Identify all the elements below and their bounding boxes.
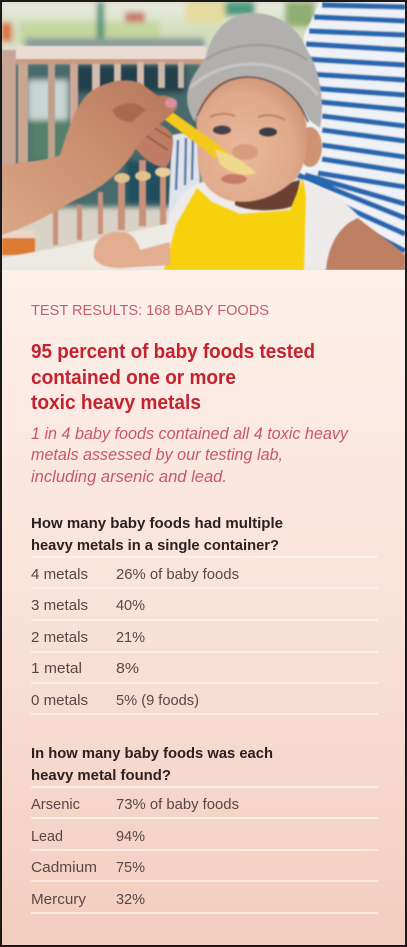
inner palm shadow [112, 103, 146, 122]
striped shirt [296, 2, 405, 254]
row: mercury [31, 891, 145, 908]
railing [2, 46, 206, 245]
thumbnail [165, 98, 177, 108]
row: arsenic: 73% of baby foods [116, 796, 239, 813]
row: arsenic [31, 796, 239, 813]
knit hat [187, 13, 322, 128]
main heading [31, 341, 315, 414]
baby hand [94, 232, 170, 268]
table heading [31, 745, 273, 784]
row: cadmium: Cadmium [31, 859, 97, 876]
row: 2 metals [31, 629, 145, 646]
row: lead [31, 828, 145, 845]
baby nose and lips [221, 144, 258, 184]
baby onesie [168, 180, 360, 270]
row: 0 metals: 5% (9 foods) [116, 692, 199, 709]
yellow bib [164, 178, 306, 270]
table heading: heavy metal found? [31, 767, 171, 784]
row: 1 metal: 8% [116, 660, 139, 677]
table: multiple heavy metals per container [31, 515, 378, 714]
row: arsenic: Arsenic [31, 796, 80, 813]
row: 3 metals: 40% [116, 597, 145, 614]
curled fingers [134, 122, 173, 168]
row: lead: 94% [116, 828, 145, 845]
italic summary text: metals assessed by our testing lab, [31, 445, 283, 464]
table heading: How many baby foods had multiple [31, 515, 283, 532]
row: 4 metals [31, 566, 239, 583]
italic summary text: including arsenic and lead. [31, 467, 227, 486]
italic summary text: 1 in 4 baby foods contained all 4 toxic heavy [31, 424, 349, 443]
row: 1 metal: 1 metal [31, 660, 82, 677]
row: 2 metals: 2 metals [31, 629, 88, 646]
main heading: toxic heavy metals [31, 392, 201, 414]
row: 2 metals: 21% [116, 629, 145, 646]
baby eyes and brows [210, 114, 285, 136]
adult hand and arm [2, 80, 177, 235]
row: 0 metals: 0 metals [31, 692, 88, 709]
yellow spoon [164, 112, 256, 176]
photo: adult spoon-feeding a baby [2, 2, 405, 270]
baby neck shadow [235, 180, 300, 210]
row: mercury: Mercury [31, 891, 87, 908]
baby head [196, 73, 307, 202]
row: 3 metals [31, 597, 145, 614]
highchair back [168, 130, 200, 222]
blurred balcony background [2, 2, 320, 212]
table: each heavy metal found [31, 745, 378, 913]
row: lead: Lead [31, 828, 63, 845]
card background [2, 270, 405, 945]
table heading [31, 515, 283, 554]
italic summary text [31, 424, 349, 486]
row: cadmium [31, 859, 145, 876]
back of hand and thumb [2, 80, 177, 235]
row: 4 metals: 26% of baby foods [116, 566, 239, 583]
highchair tray [2, 223, 172, 270]
main heading: 95 percent of baby foods tested [31, 341, 315, 363]
row: mercury: 32% [116, 891, 145, 908]
kicker: test results: TEST RESULTS: 168 BABY FOODS [31, 303, 269, 319]
row: 1 metal [31, 660, 139, 677]
baby far arm [326, 218, 405, 270]
row: 3 metals: 3 metals [31, 597, 88, 614]
row: 0 metals [31, 692, 199, 709]
row: 4 metals: 4 metals [31, 566, 88, 583]
main heading: contained one or more [31, 367, 236, 389]
baby ear [302, 126, 323, 168]
table heading: In how many baby foods was each [31, 745, 273, 762]
orange chair edge [2, 230, 35, 255]
table heading: heavy metals in a single container? [31, 537, 279, 554]
row: cadmium: 75% [116, 859, 145, 876]
